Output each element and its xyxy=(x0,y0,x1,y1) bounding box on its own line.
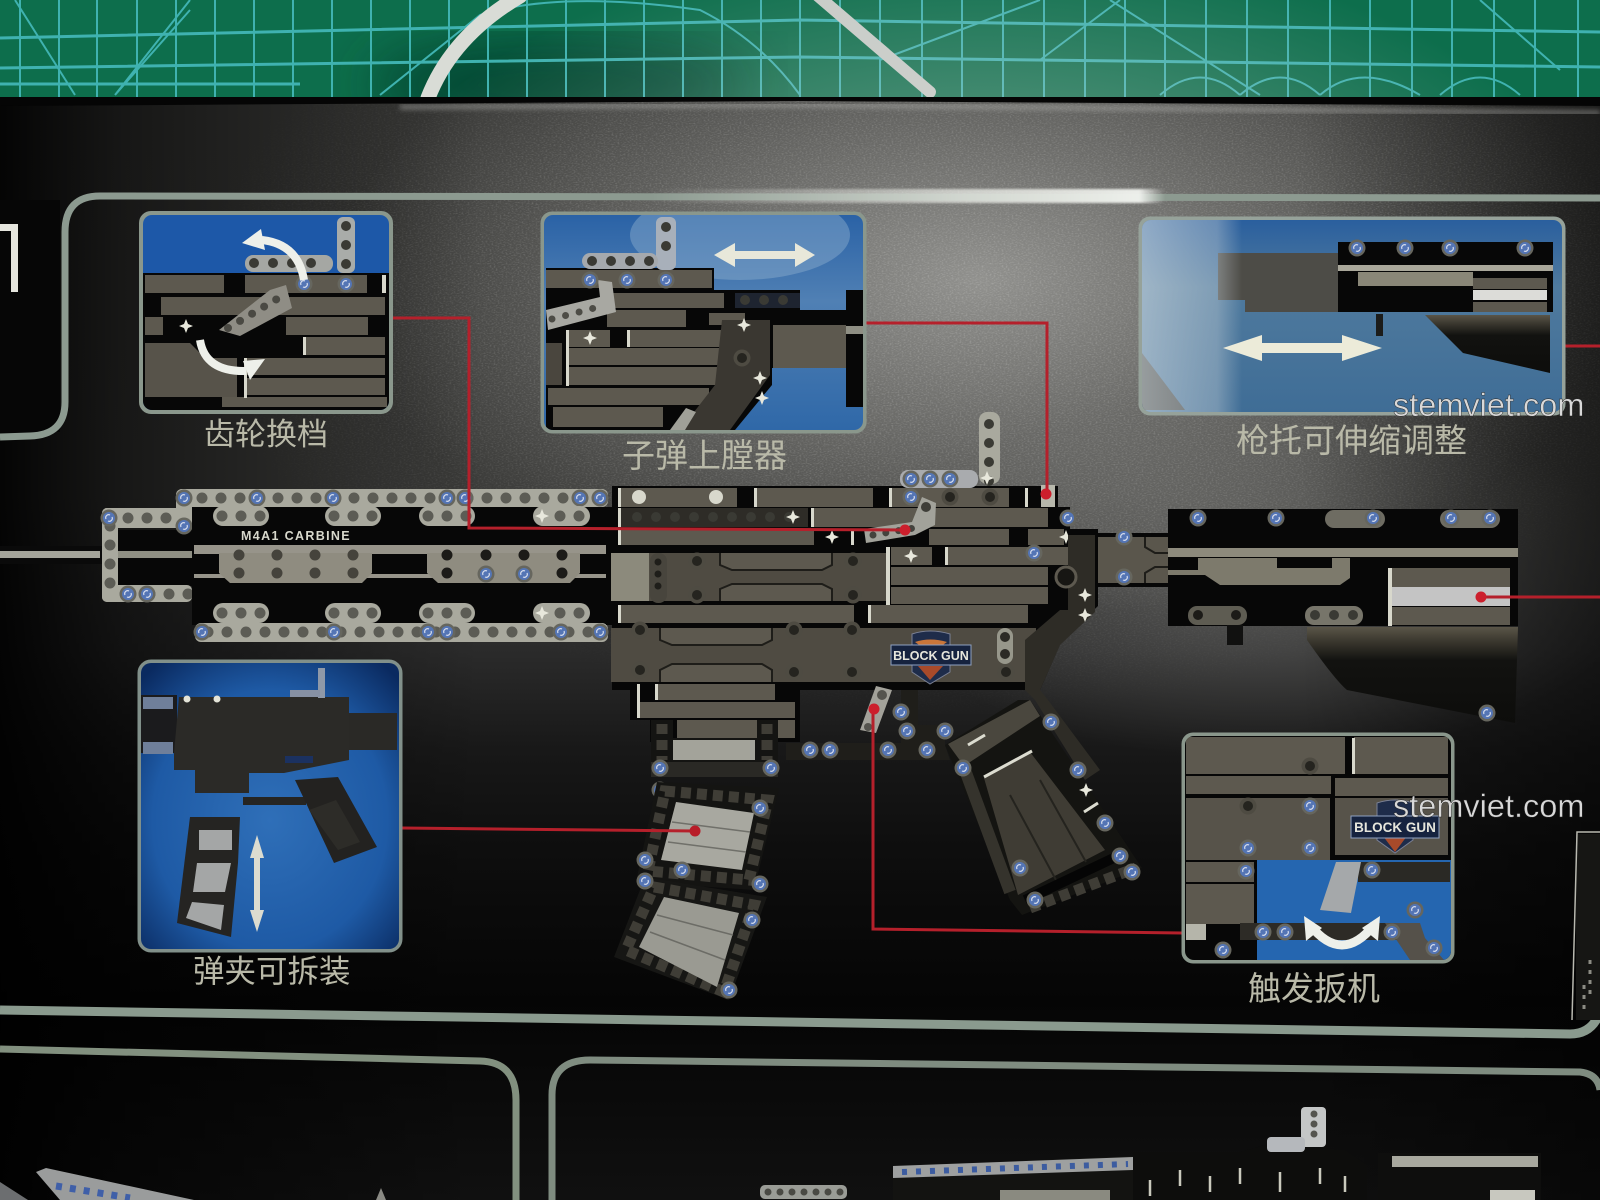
panel: lower right xyxy=(552,1060,1600,1200)
right edge product fragment xyxy=(1572,832,1600,1020)
label: gear shift: 齿轮换档 xyxy=(204,417,328,452)
rifle: barrel xyxy=(0,546,110,564)
logo: Block Gun: BLOCK GUN xyxy=(893,649,969,663)
rifle: pistol grip xyxy=(945,700,1142,915)
lower right panel: rifle fragment xyxy=(760,1107,1541,1200)
inset: gear shift xyxy=(141,213,391,412)
rifle: handguard xyxy=(192,506,612,625)
watermark: lower: stemviet.com xyxy=(1393,788,1584,824)
label: trigger: 触发扳机 xyxy=(1248,970,1380,1007)
frame glare xyxy=(650,189,1165,203)
rifle: magazine xyxy=(614,720,780,1000)
watermark: upper: stemviet.com xyxy=(1393,387,1584,423)
white cable arc xyxy=(428,0,930,98)
lower left panel: rifle fragment xyxy=(0,1168,386,1200)
label: removable magazine: 弹夹可拆装 xyxy=(193,953,351,989)
rifle: trigger xyxy=(860,686,892,733)
rifle: model name: M4A1 CARBINE xyxy=(241,529,351,543)
panel: left heading block xyxy=(0,200,60,432)
inset: trigger xyxy=(1183,734,1453,962)
logo: Block Gun on trigger inset: BLOCK GUN xyxy=(1354,820,1436,835)
label: chamber loader: 子弹上膛器 xyxy=(622,437,787,474)
inset: removable magazine xyxy=(139,661,401,951)
panel: lower left xyxy=(0,1049,516,1200)
rifle: stock xyxy=(1168,509,1518,723)
rifle: front sight frame xyxy=(100,508,192,602)
rifle: receiver xyxy=(606,485,1098,742)
logo: Block Gun xyxy=(891,631,971,684)
rifle: bottom rail xyxy=(194,623,608,642)
rifle: trigger guard xyxy=(786,690,954,760)
inset: chamber loader xyxy=(542,190,865,432)
panel frame: main xyxy=(0,196,1600,437)
inset: telescoping stock xyxy=(1140,218,1564,414)
rifle: top rail xyxy=(176,489,608,534)
panel frame: lower edge xyxy=(0,1010,1600,1034)
logo: Block Gun on trigger inset xyxy=(1351,800,1439,853)
red leader lines xyxy=(392,318,1600,933)
label: telescoping stock: 枪托可伸缩调整 xyxy=(1236,422,1467,459)
background: green cutting mat xyxy=(0,0,1600,130)
rifle: rear linkage xyxy=(1025,528,1170,780)
rifle: charging lever xyxy=(864,412,1000,543)
